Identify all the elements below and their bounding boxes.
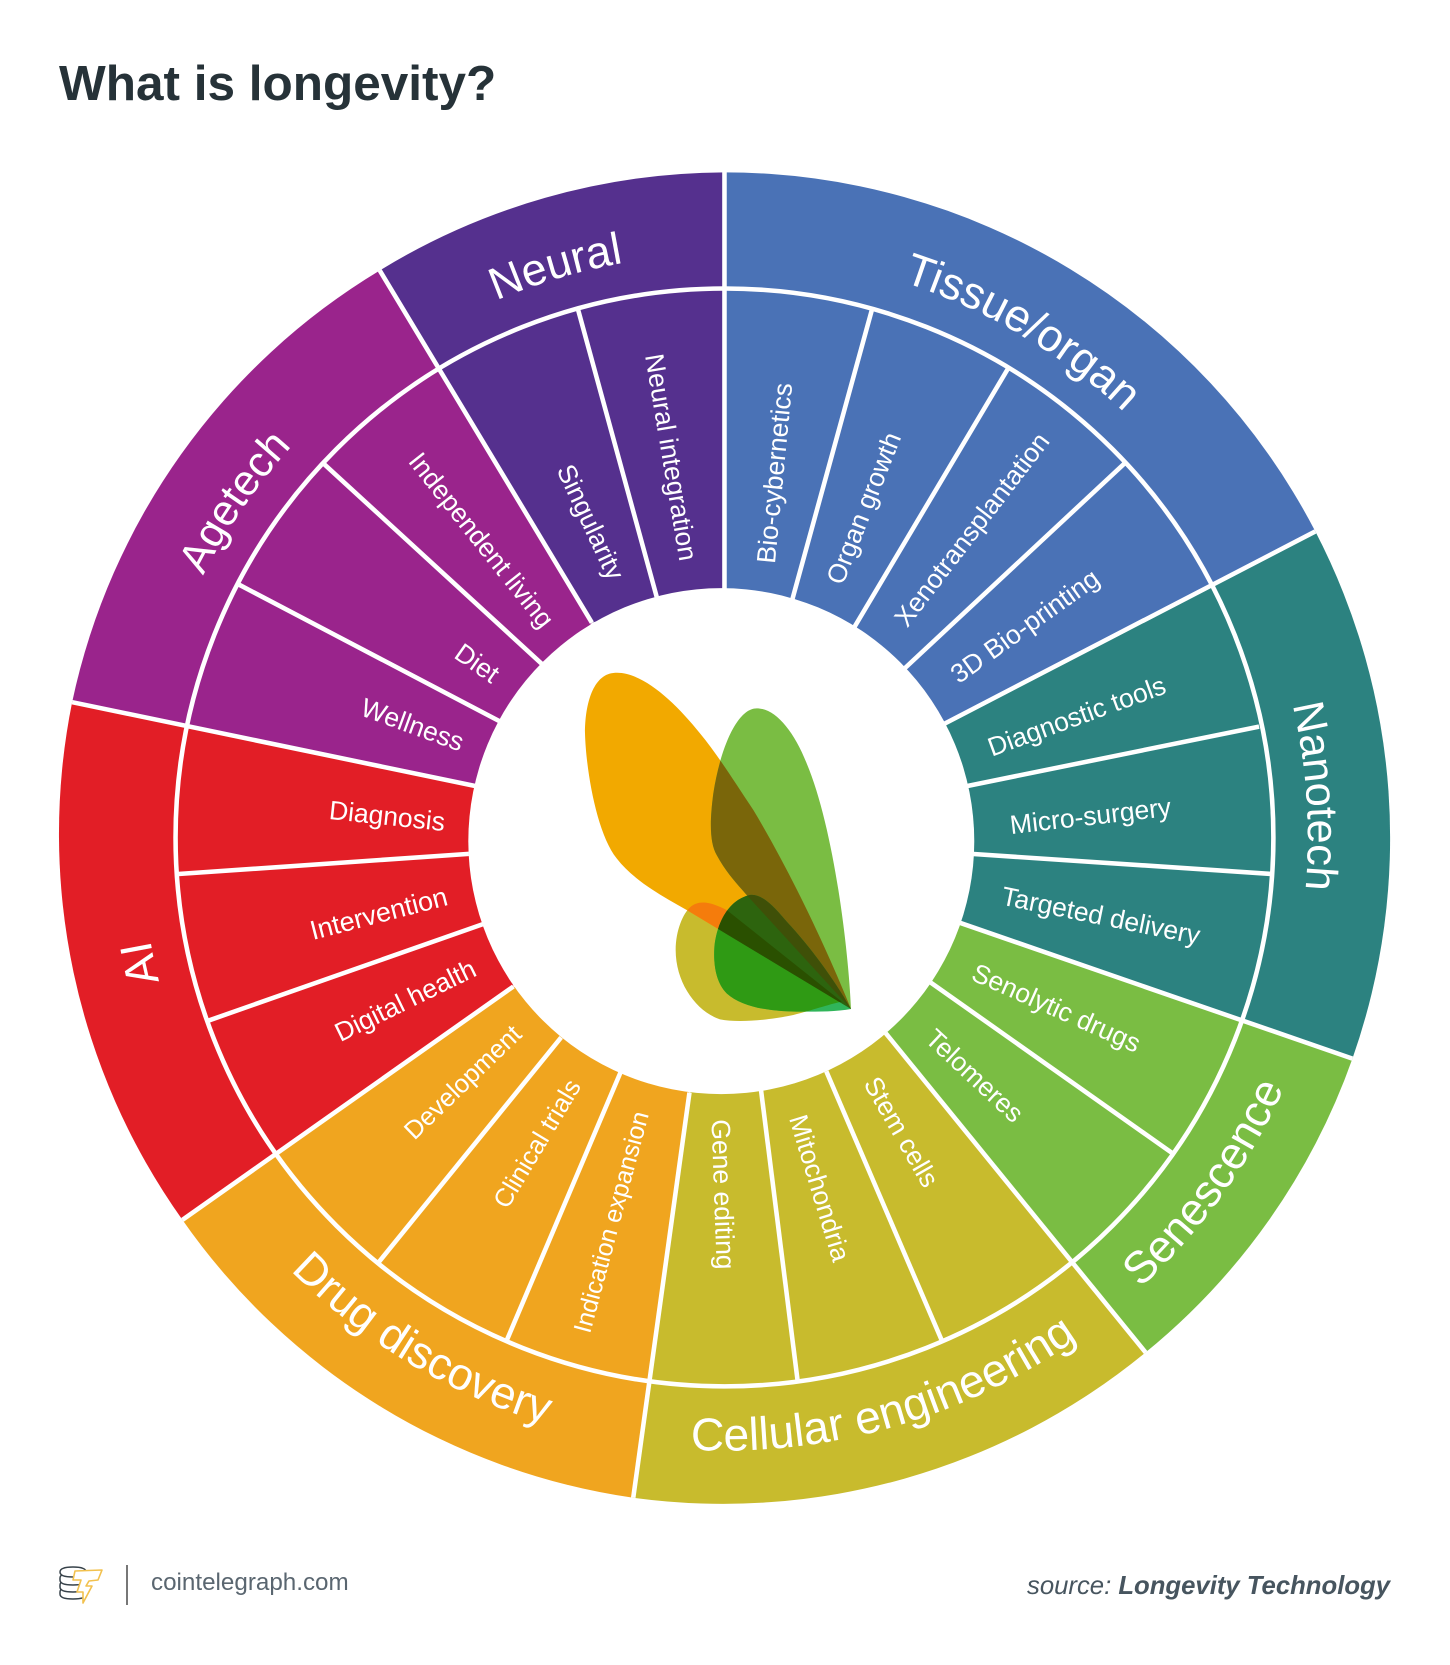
label: Bio-cybernetics: Bio-cybernetics (751, 382, 798, 565)
label: Intervention: Intervention (307, 882, 451, 946)
heading: Tissue/organ: Tissue/organ (912, 252, 1136, 410)
icon: central leaf logo (585, 673, 851, 1021)
label: Independent living: Independent living (403, 447, 560, 634)
heading: Cellular engineering: Cellular engineering (693, 1320, 1078, 1451)
label: Mitochondria: Mitochondria (783, 1111, 856, 1265)
source credit: source: Longevity Technology (1027, 1572, 1392, 1600)
sunburst wheel (58, 172, 1390, 1504)
label: Micro-surgery: Micro-surgery (1008, 792, 1173, 840)
panel: Agetech (72, 270, 592, 784)
icon: coin stack footer (60, 1567, 86, 1599)
footer url: cointelegraph.com (151, 1569, 349, 1596)
panel: AI (58, 702, 514, 1220)
label: Senolytic drugs: Senolytic drugs (968, 957, 1145, 1058)
label: Neural integration: Neural integration (639, 352, 703, 563)
label: Digital health: Digital health (330, 953, 481, 1048)
label: Telomeres: Telomeres (920, 1023, 1030, 1128)
icon: yellow T bolt (73, 1570, 102, 1603)
label: Xenotransplantation: Xenotransplantation (888, 427, 1055, 632)
label: Organ growth: Organ growth (820, 428, 907, 588)
label: Wellness: Wellness (357, 692, 468, 757)
panel: Senescence (886, 925, 1352, 1352)
label: Diagnosis: Diagnosis (328, 795, 447, 837)
title: What is longevity? (59, 56, 496, 111)
label: Indication expansion: Indication expansion (569, 1108, 655, 1336)
heading: Agetech: Agetech (182, 436, 290, 576)
panel: Drug discovery (182, 986, 690, 1498)
heading: Senescence: Senescence (1124, 1082, 1281, 1283)
label: Clinical trials: Clinical trials (488, 1075, 587, 1213)
panel: Nanotech (946, 532, 1390, 1058)
label: Development: Development (399, 1020, 527, 1145)
label: Gene editing: Gene editing (706, 1119, 741, 1270)
divider (126, 1565, 128, 1605)
heading: AI: AI (120, 944, 159, 982)
panel: Cellular engineering (633, 1034, 1146, 1504)
panel: Neural (380, 172, 722, 623)
heading: Nanotech: Nanotech (1294, 702, 1338, 888)
label: Diet: Diet (449, 637, 506, 689)
panel: Tissue/organ (726, 172, 1316, 722)
label: Stem cells: Stem cells (858, 1071, 945, 1192)
label: Targeted delivery: Targeted delivery (999, 881, 1204, 951)
label: Diagnostic tools: Diagnostic tools (984, 670, 1170, 762)
heading: Neural: Neural (488, 231, 620, 299)
label: 3D Bio-printing: 3D Bio-printing (945, 563, 1105, 689)
heading: Drug discovery: Drug discovery (293, 1250, 553, 1428)
label: Singularity: Singularity (551, 460, 631, 585)
